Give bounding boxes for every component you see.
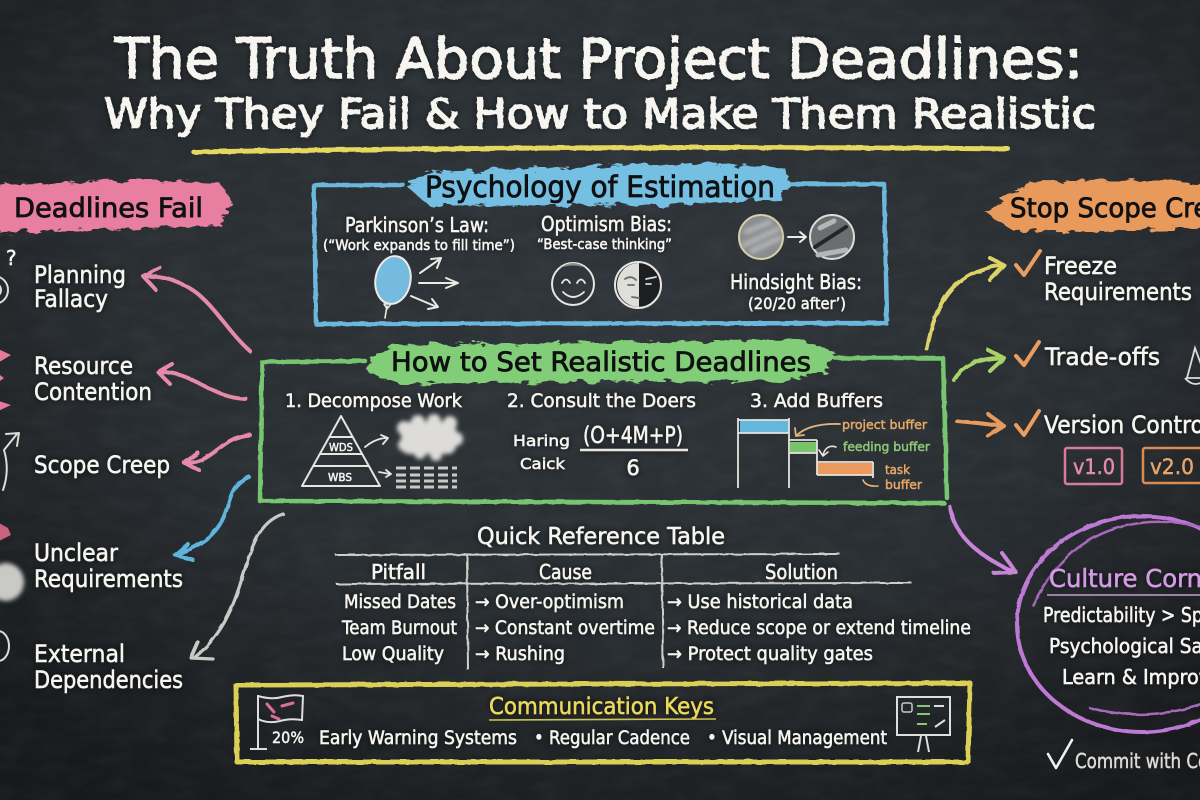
column: pitfall: Missed Dates <box>344 592 456 613</box>
icon: balance scale <box>1185 348 1200 384</box>
icon: task grid <box>396 468 457 487</box>
icon: WBS pyramid <box>302 416 391 486</box>
Parkinson's law text <box>323 213 515 254</box>
icon: balloon with arrows <box>372 253 458 318</box>
heading: Communication Keys <box>489 694 714 720</box>
icon: planning fallacy target <box>0 246 17 304</box>
PERT label: Haring <box>513 432 570 450</box>
PERT formula: (O+4M+P) <box>583 423 683 449</box>
column: cause <box>475 592 655 665</box>
item: resource contention <box>34 352 152 406</box>
title <box>104 27 1096 138</box>
column: solution: → Protect quality gates <box>667 644 873 665</box>
step headings <box>285 390 883 412</box>
item: trade-offs: Trade-offs <box>1044 343 1160 371</box>
heading: How to Set Realistic Deadlines <box>391 347 811 378</box>
arrow: to freeze requirements <box>927 258 1004 349</box>
item: resource contention: Resource <box>34 352 133 380</box>
gantt buffer chart: project buffer <box>842 417 928 432</box>
culture values <box>1043 603 1200 689</box>
gantt buffer chart: feeding buffer <box>843 439 931 454</box>
step headings: 2. Consult the Doers <box>507 390 696 412</box>
heading banner <box>0 180 232 233</box>
PERT label: Caick <box>520 455 565 473</box>
column: solution <box>667 592 971 665</box>
panel: why deadlines fail <box>0 180 232 694</box>
arrow: unclear requirements <box>175 477 249 560</box>
version tag v2.0: v2.0 <box>1150 455 1194 479</box>
arrow: external dependencies <box>191 514 283 659</box>
icon: planning fallacy target: ? <box>6 246 17 270</box>
arrow: resource contention <box>158 364 246 399</box>
item: unclear requirements: Requirements <box>34 565 183 593</box>
heading underline <box>489 719 716 720</box>
icon: half-lit face <box>615 262 661 308</box>
panel: psychology of estimation <box>314 163 887 324</box>
table header <box>371 560 838 584</box>
heading: Deadlines Fail <box>14 193 203 224</box>
Hindsight bias text: (20/20 after’) <box>748 294 846 313</box>
checkmarks <box>1016 251 1040 435</box>
icon: flag <box>250 695 303 749</box>
panel border <box>314 184 887 324</box>
icon: WBS pyramid: WDS <box>329 441 353 454</box>
icon: WBS pyramid: WBS <box>328 471 352 484</box>
table header: Cause <box>539 560 592 584</box>
icon: chalk cloud <box>397 414 463 461</box>
arrow: to version control <box>957 414 1004 436</box>
item: freeze requirements: Freeze <box>1044 252 1117 280</box>
arrow: planning fallacy <box>143 268 250 351</box>
communication items: • Visual Management <box>707 728 887 749</box>
panel: culture corner <box>950 507 1200 773</box>
heading: Psychology of Estimation <box>425 170 775 204</box>
table header: Solution <box>765 560 838 584</box>
table rules <box>335 554 912 670</box>
table header: Pitfall <box>371 560 426 584</box>
item: scope creep: Scope Creep <box>34 451 170 479</box>
panel: how to set realistic deadlines <box>260 340 947 503</box>
step headings: 1. Decompose Work <box>285 390 462 412</box>
PERT label <box>513 432 570 473</box>
version tag v1.0: v1.0 <box>1073 455 1115 479</box>
flag percentage: 20% <box>272 728 304 747</box>
gantt buffer chart <box>738 417 931 492</box>
column: pitfall <box>341 592 457 665</box>
title underline <box>194 148 1008 152</box>
communication items: Early Warning Systems <box>319 728 517 749</box>
icon: unclear requirements cloud <box>0 522 24 601</box>
version tag v1.0 <box>1065 448 1122 484</box>
item: external dependencies <box>34 640 183 694</box>
Hindsight bias text <box>730 270 862 313</box>
Optimism bias text <box>537 212 672 253</box>
gantt buffer chart: task <box>885 462 911 477</box>
Hindsight bias text: Hindsight Bias: <box>730 270 862 294</box>
arrow: to culture corner <box>950 507 1016 573</box>
communication items <box>319 728 887 749</box>
column: pitfall: Team Burnout <box>341 618 457 639</box>
column: cause: → Over-optimism <box>475 592 624 613</box>
PERT formula <box>580 423 688 480</box>
title: The Truth About Project Deadlines: <box>114 27 1083 91</box>
icon: resource contention arrows <box>0 348 11 412</box>
quick reference table <box>335 524 971 670</box>
arrow: scope creep <box>184 435 250 470</box>
step headings: 3. Add Buffers <box>750 390 883 412</box>
table title: Quick Reference Table <box>477 524 725 550</box>
heading banner <box>985 180 1200 232</box>
icon: smiling face <box>552 263 594 305</box>
column: cause: → Rushing <box>475 644 565 665</box>
icon: scope creep arrow <box>3 433 19 490</box>
column: solution: → Use historical data <box>667 592 853 613</box>
item: planning fallacy <box>34 261 126 313</box>
Optimism bias text: Optimism Bias: <box>541 212 672 236</box>
column: solution: → Reduce scope or extend timeline <box>667 618 971 639</box>
Parkinson's law text: (“Work expands to fill time”) <box>323 238 515 254</box>
heading rule <box>1047 594 1200 596</box>
item: external dependencies: Dependencies <box>34 666 183 694</box>
item: planning fallacy: Planning <box>34 261 126 289</box>
panel border <box>260 358 947 503</box>
column: pitfall: Low Quality <box>342 644 444 665</box>
gantt buffer chart: buffer <box>885 477 923 492</box>
icon: external dependencies <box>0 631 9 661</box>
PERT formula: 6 <box>626 456 640 480</box>
icon: blurred circle to clear circle <box>739 215 854 259</box>
arrows to failure causes <box>143 268 283 659</box>
communication items: • Regular Cadence <box>534 728 690 749</box>
panel: stop scope creep <box>927 180 1200 484</box>
heading banner <box>367 340 835 384</box>
item: unclear requirements <box>34 539 183 593</box>
arrow: to trade-offs <box>954 350 1004 380</box>
panel border <box>236 683 970 762</box>
circle outline <box>1017 516 1200 732</box>
heading banner <box>407 163 790 206</box>
title: Why They Fail & How to Make Them Realistic <box>104 90 1096 138</box>
panel: communication keys <box>236 683 970 762</box>
version tag v2.0 <box>1143 448 1200 483</box>
item: planning fallacy: Fallacy <box>34 285 108 313</box>
column: cause: → Constant overtime <box>475 618 655 639</box>
item: resource contention: Contention <box>34 378 152 406</box>
commit check mark <box>1048 740 1072 768</box>
item: external dependencies: External <box>34 640 125 668</box>
Optimism bias text: “Best-case thinking” <box>537 237 672 253</box>
icon: kanban board <box>897 697 950 752</box>
Parkinson's law text: Parkinson’s Law: <box>345 213 489 237</box>
item: freeze requirements <box>1044 252 1192 306</box>
item: unclear requirements: Unclear <box>34 539 118 567</box>
